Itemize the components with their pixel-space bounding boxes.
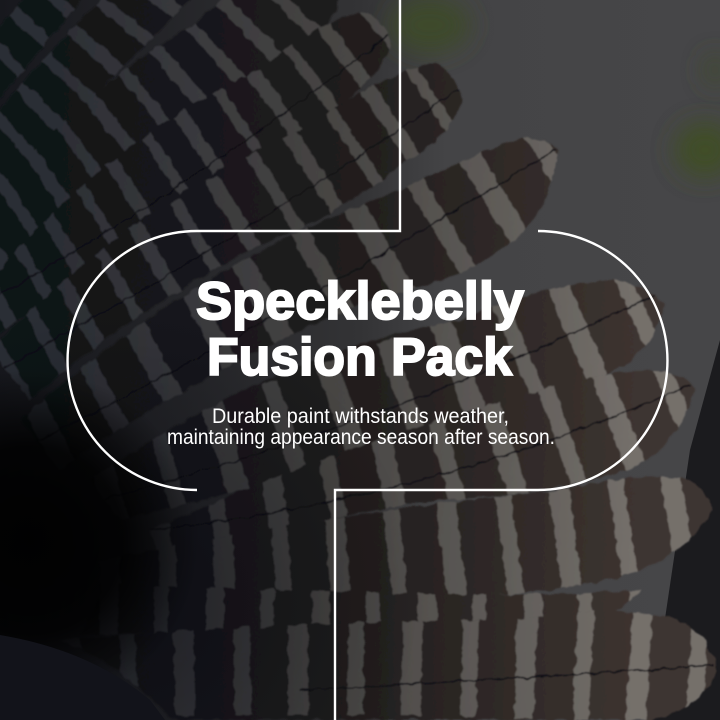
feather: top right: [29, 136, 559, 432]
feather: sixth right: [60, 611, 720, 720]
feather: second right: [136, 279, 665, 508]
subtitle: [167, 405, 555, 449]
feather: third right: [164, 370, 695, 546]
frame line: upper segment: [68, 0, 400, 490]
feather: fourth right: [157, 476, 713, 596]
subtitle: maintaining appearance season after season.: [167, 426, 555, 449]
title: Specklebelly: [196, 272, 525, 331]
title: [196, 272, 525, 387]
feather: upper left 4: [0, 62, 465, 400]
feather: upper left 1: [0, 0, 190, 188]
title: Fusion Pack: [207, 328, 513, 387]
feather: top corner: [0, 0, 80, 98]
subtitle: Durable paint withstands weather,: [212, 405, 509, 428]
feather: upper left 2: [0, 0, 340, 280]
feather: fifth right: [154, 586, 642, 632]
feather: upper left 3: [0, 12, 395, 340]
frame line: lower segment: [335, 231, 667, 720]
